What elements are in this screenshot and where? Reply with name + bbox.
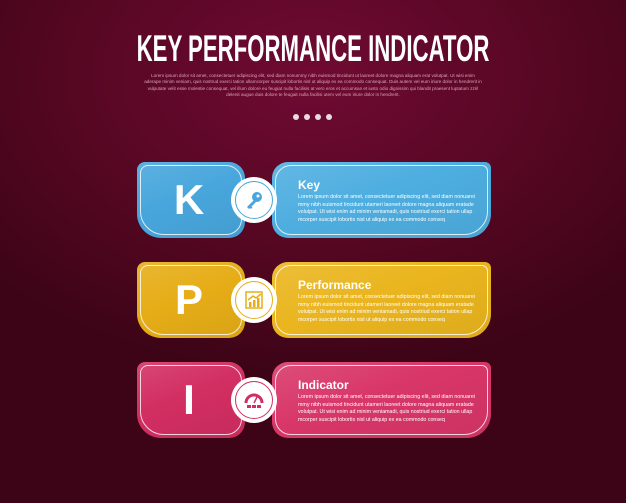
panel: K key (137, 162, 491, 238)
icon: key (231, 177, 277, 223)
panel: K key: Lorem ipsum dolor sit amet, consectetuer adipiscing elit, sed diam nonuarei mmy nibh euismod tincidunt utameri laoreet dolore magna aliquam eratade volutpat. Ut wisi enim ad minim veniamadi, quis nostriud exerci tation ullap mcorper suscipit lobortis nisl ut aliquip ex ea commodo conseq (298, 194, 475, 222)
panel: I indicator: Lorem ipsum dolor sit amet, consectetuer adipiscing elit, sed diam nonuarei mmy nibh euismod tincidunt utameri laoreet dolore magna aliquam eratade volutpat. Ut wisi enim ad minim veniamadi, quis nostriud exerci tation ullap mcorper suscipit lobortis nisl ut aliquip ex ea commodo conseq (298, 394, 475, 422)
panel: P performance: Performance (298, 278, 371, 292)
icon: gauge (231, 377, 277, 423)
panel: I indicator: I (183, 376, 195, 423)
subtitle text: Lorem ipsum dolor sit amet, consectetuer adipiscing elit, sed diam nonummy nibh euismod tincidunt ut laoreet dolore magna aliquam erat volutpat. Ut wisi enim aderape minim veniam, quis nostrud exerci tation ullamcorper suscipit lobortis nisl ut aliquip ex ea commodo consequat. Duis autem vel eum iriure dolor in hendrerit in vulputate velit esse molestie consequat, vel illum dolore eu feugiat nulla facilisis at vero eros et accumsan et iusto odio dignissim qui blandit praesent luptatum zzril delenit augue duis dolore te feugait nulla facilisi utem vel eum iriure dolor in hendrerit. (144, 73, 482, 97)
panel: P performance: P (175, 276, 203, 323)
panel: K key: K (174, 176, 204, 223)
title: KEY PERFORMANCE INDICATOR (137, 28, 489, 69)
panel: P performance: Lorem ipsum dolor sit amet, consectetuer adipiscing elit, sed diam nonuarei mmy nibh euismod tincidunt utameri laoreet dolore magna aliquam eratade volutpat. Ut wisi enim ad minim veniamadi, quis nostriud exerci tation ullap mcorper suscipit lobortis nisl ut aliquip ex ea commodo conseq (298, 294, 475, 322)
panel: I indicator: Indicator (298, 378, 349, 392)
dots (293, 114, 332, 120)
icon: chart (231, 277, 277, 323)
panel: P performance (137, 262, 491, 338)
panel: K key: Key (298, 178, 320, 192)
panel: I indicator (137, 362, 491, 438)
